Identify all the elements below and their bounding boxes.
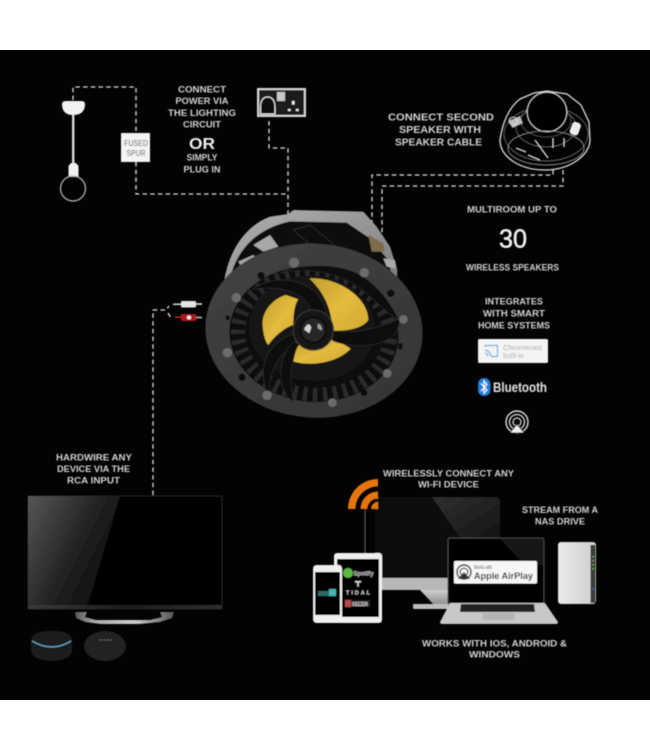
badge: apple airplay: Apple AirPlay bbox=[474, 571, 534, 582]
text: connect power: PLUG IN bbox=[184, 164, 220, 174]
image: tablet with music services: TIDAL bbox=[346, 590, 371, 596]
badge: chromecast built-in bbox=[478, 339, 548, 363]
text: connect power: THE LIGHTING bbox=[168, 108, 236, 118]
icon: airplay bbox=[506, 411, 528, 433]
text: smart home: INTEGRATES bbox=[485, 296, 543, 306]
icon: pendant lamp bbox=[60, 101, 86, 201]
text: connect power: CONNECT bbox=[178, 84, 227, 94]
image: laptop bbox=[440, 538, 558, 624]
badge: apple airplay bbox=[454, 561, 537, 584]
image: tablet with music services: Spotify bbox=[354, 570, 374, 578]
text: connect power bbox=[168, 84, 236, 174]
wiring: second speaker cable bbox=[372, 170, 563, 236]
text: connect power: SIMPLY bbox=[186, 152, 218, 162]
text: connect second speaker: SPEAKER WITH bbox=[399, 125, 481, 136]
badge: chromecast built-in: Chromecast bbox=[503, 343, 543, 352]
logo: bluetooth bbox=[478, 378, 547, 396]
image: phone bbox=[313, 565, 342, 623]
text: multiroom: MULTIROOM UP TO bbox=[467, 204, 557, 214]
text: multiroom bbox=[466, 204, 559, 272]
text: connect second speaker bbox=[388, 112, 494, 148]
text: wireless connect bbox=[383, 468, 514, 490]
tweeter bbox=[293, 310, 333, 350]
text: hardwire: DEVICE VIA THE bbox=[57, 464, 130, 474]
text: connect second speaker: CONNECT SECOND bbox=[388, 112, 494, 124]
logo: bluetooth: Bluetooth bbox=[493, 379, 547, 395]
box: fused spur bbox=[121, 133, 150, 162]
image: NAS drive bbox=[558, 542, 596, 604]
text: connect second speaker: SPEAKER CABLE bbox=[395, 138, 482, 148]
wiring: plug socket bbox=[269, 121, 288, 194]
text: connect power: OR bbox=[189, 136, 215, 153]
grille fins bbox=[225, 260, 403, 408]
box: fused spur: SPUR bbox=[126, 149, 146, 158]
wiring: lighting circuit and fused spur bbox=[73, 87, 288, 224]
text: wireless connect: WI-FI DEVICE bbox=[418, 480, 479, 490]
text: hardwire: RCA INPUT bbox=[67, 476, 121, 486]
image: second speaker line drawing bbox=[500, 91, 590, 170]
box: fused spur: FUSED bbox=[124, 139, 148, 148]
text: connect power: POWER VIA bbox=[176, 96, 229, 106]
kevlar cone bbox=[263, 278, 368, 364]
image: tablet with music services bbox=[334, 553, 382, 623]
text: platforms bbox=[422, 638, 568, 660]
badge: chromecast built-in: built-in bbox=[503, 351, 524, 360]
text: NAS: NAS DRIVE bbox=[535, 516, 585, 526]
icon: wall socket bbox=[257, 88, 306, 117]
mounting discs and screws bbox=[223, 258, 408, 407]
image: smart speaker with blue ring bbox=[31, 631, 72, 661]
spiral arms bbox=[253, 266, 399, 402]
RCA connectors bbox=[173, 301, 202, 321]
text: wireless connect: WIRELESSLY CONNECT ANY bbox=[383, 468, 514, 478]
speaker front plate bbox=[200, 236, 428, 425]
text: hardwire: HARDWIRE ANY bbox=[56, 452, 132, 462]
image: television bbox=[28, 496, 222, 624]
text: connect power: CIRCUIT bbox=[183, 120, 222, 130]
text: smart home: HOME SYSTEMS bbox=[478, 320, 550, 330]
text: hardwire bbox=[56, 452, 132, 486]
speaker back can bbox=[224, 210, 397, 290]
image: tablet with music services: DEEZER bbox=[352, 602, 368, 608]
image: desktop monitor bbox=[375, 497, 500, 609]
text: smart home: WITH SMART bbox=[483, 308, 546, 318]
image: main ceiling speaker bbox=[200, 210, 428, 425]
text: multiroom: 30 bbox=[499, 224, 527, 254]
text: platforms: WORKS WITH IOS, ANDROID & bbox=[422, 638, 568, 648]
infographic content bbox=[28, 84, 598, 661]
image: smart speaker round bbox=[84, 631, 126, 661]
icon: wifi signal bbox=[348, 479, 378, 553]
badge: apple airplay: Works with bbox=[474, 565, 492, 571]
wiring: RCA cable bbox=[153, 306, 171, 495]
text: NAS bbox=[522, 505, 598, 526]
text: NAS: STREAM FROM A bbox=[522, 505, 598, 515]
text: multiroom: WIRELESS SPEAKERS bbox=[466, 262, 559, 272]
text: platforms: WINDOWS bbox=[469, 650, 520, 660]
text: smart home bbox=[478, 296, 550, 330]
